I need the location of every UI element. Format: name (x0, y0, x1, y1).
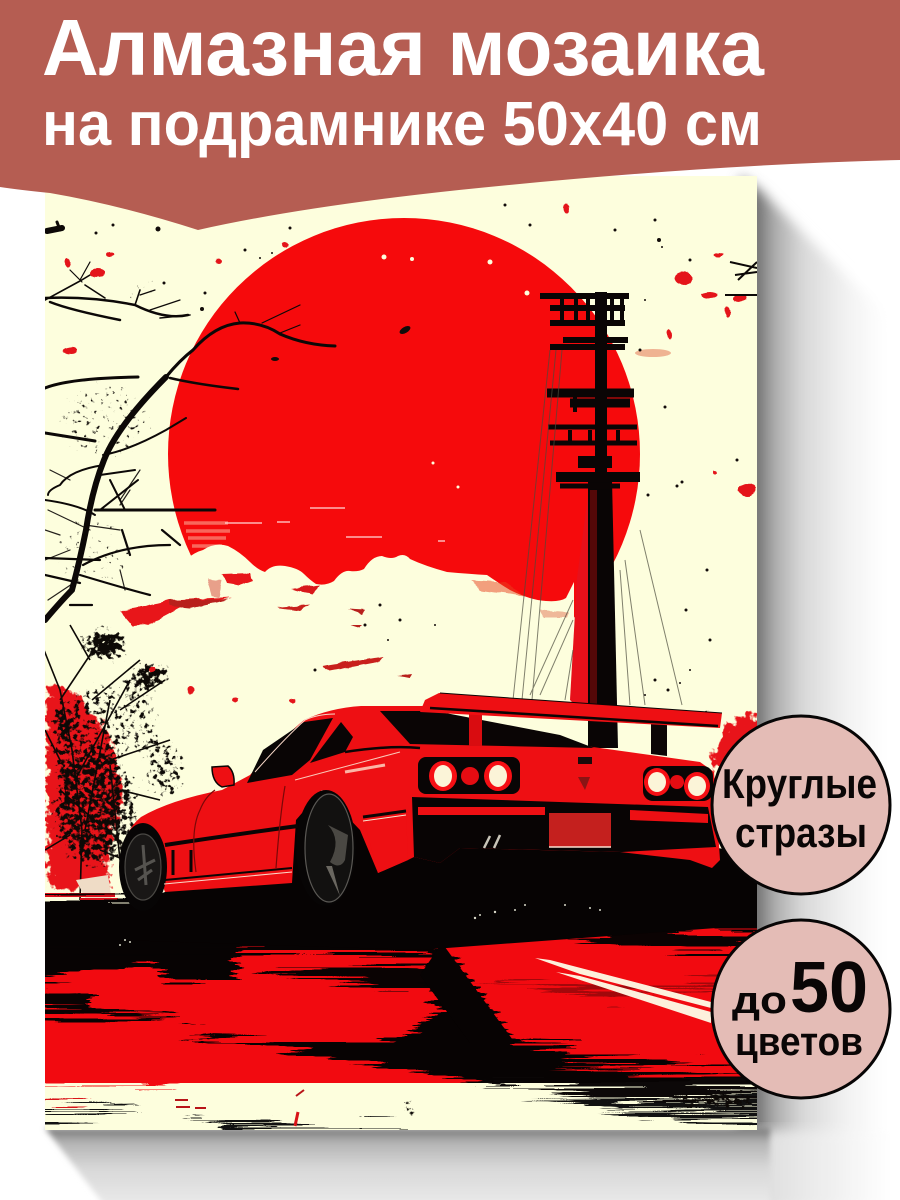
rear bumper (412, 797, 716, 863)
bare tree branches (45, 222, 335, 620)
ground sparkle (119, 904, 601, 946)
red road surface (45, 922, 757, 1087)
badge: up to 50 colors (712, 920, 890, 1098)
rear window (380, 711, 594, 748)
badge: round rhinestones: Круглые (722, 760, 877, 807)
bottom brush strokes (20, 1082, 780, 1132)
rear fender (378, 860, 408, 873)
car body (121, 706, 720, 892)
badge: up to 50 colors: 50 (790, 948, 868, 1028)
front wheel (119, 823, 167, 911)
badge: up to 50 colors: цветов (735, 1020, 863, 1064)
side stripe and sill (164, 747, 420, 884)
right red splatter (62, 204, 757, 774)
rear lights left (418, 757, 520, 794)
road (20, 903, 780, 1132)
rear emblem (578, 777, 590, 790)
lower left dark tree (40, 625, 189, 903)
title: Алмазная мозаика (42, 3, 764, 92)
red sun (168, 218, 640, 618)
subtitle: на подрамнике 50х40 см (42, 90, 762, 159)
side windows (247, 718, 333, 783)
rear lights right (643, 766, 713, 801)
clouds (191, 544, 574, 690)
white sun flecks (382, 254, 530, 488)
spoiler (420, 693, 722, 756)
rear wheel (302, 790, 354, 903)
header banner (0, 0, 900, 230)
bottom cream band (45, 1083, 755, 1089)
mirror (212, 766, 234, 787)
badge: up to 50 colors: до (732, 980, 787, 1022)
telephone pole (513, 292, 682, 748)
car shadow (156, 812, 757, 949)
black specks (94, 204, 738, 696)
red sports car (119, 693, 757, 950)
badge: round rhinestones (712, 716, 890, 894)
red brush strokes (120, 573, 568, 678)
painting (20, 176, 780, 1132)
white road stripe (535, 958, 711, 1023)
black road shadows (20, 903, 780, 1085)
painting background (45, 176, 757, 904)
badge: round rhinestones: стразы (735, 809, 867, 856)
